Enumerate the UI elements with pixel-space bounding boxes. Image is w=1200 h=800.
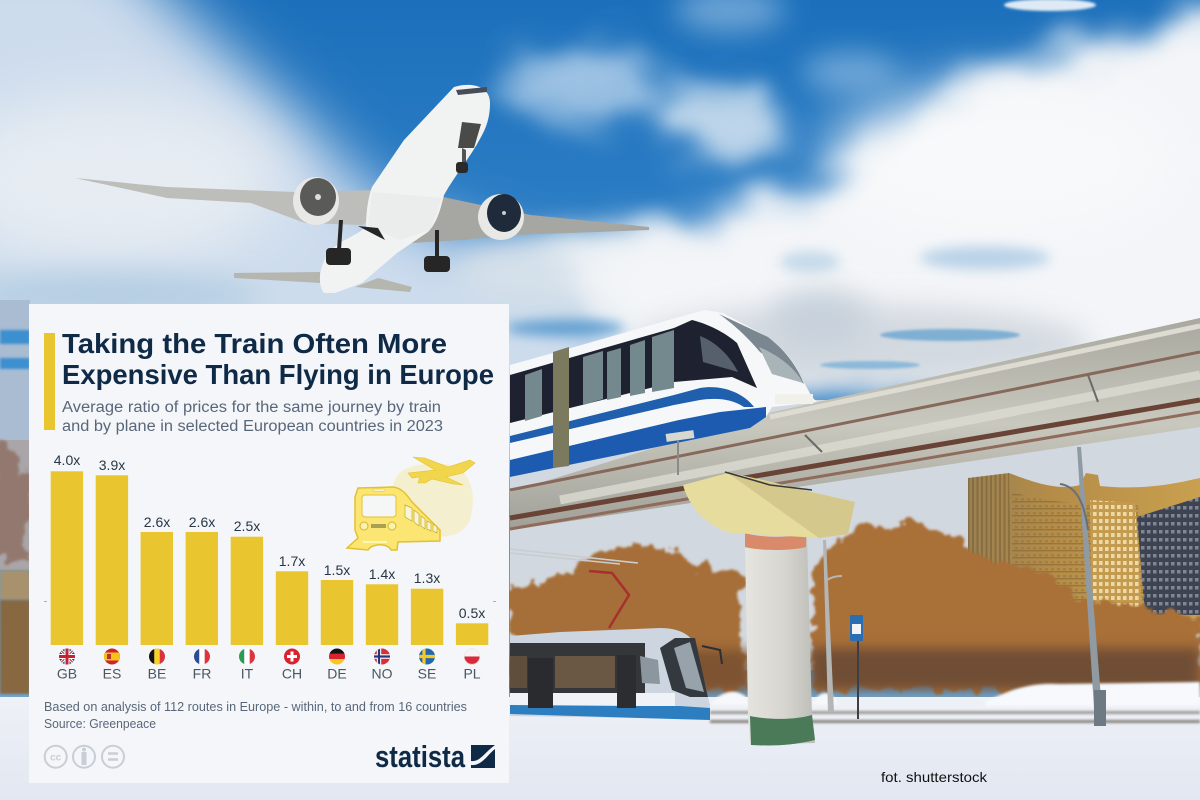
country codes: GB <box>57 666 77 682</box>
train blue stripes <box>510 387 754 443</box>
country codes: IT <box>241 666 254 682</box>
creative commons icons <box>45 746 124 768</box>
bar chart <box>44 452 496 682</box>
country codes: NO <box>372 666 393 682</box>
train roof edge and windscreen <box>719 314 804 384</box>
monorail guideway beam <box>510 318 1200 530</box>
value labels: 3.9x <box>99 457 125 473</box>
value labels: 2.5x <box>234 518 260 534</box>
bars <box>51 471 488 645</box>
autumn trees <box>0 440 1200 694</box>
left strip of trees <box>0 440 30 694</box>
country codes: FR <box>193 666 211 682</box>
value labels <box>54 452 485 621</box>
plane: right engine <box>478 194 524 240</box>
left strip of sky stripes <box>0 300 30 570</box>
source note: Source: Greenpeace <box>44 717 156 731</box>
plane: tailplane <box>234 272 412 292</box>
value labels: 1.4x <box>369 566 395 582</box>
subtitle: and by plane in selected European countries in 2023 <box>62 418 443 435</box>
monorail train <box>510 310 817 477</box>
title: Taking the Train Often More <box>62 328 447 359</box>
value labels: 0.5x <box>459 605 485 621</box>
plane: right wing <box>412 197 649 243</box>
creative commons icons: cc <box>50 752 62 764</box>
value labels: 2.6x <box>144 514 170 530</box>
plane: landing gear <box>326 220 450 272</box>
value labels: 4.0x <box>54 452 80 468</box>
plane: left engine <box>293 177 339 225</box>
country codes: BE <box>148 666 166 682</box>
train gangway <box>553 347 569 468</box>
country codes: PL <box>463 666 481 682</box>
illustration: plane and train <box>347 457 475 550</box>
country codes: CH <box>282 666 302 682</box>
snowy ground <box>0 682 1200 800</box>
country codes: ES <box>103 666 121 682</box>
chart panel <box>29 304 509 783</box>
pier: column and saddle <box>683 472 855 745</box>
country codes: DE <box>327 666 347 682</box>
train body <box>510 310 817 477</box>
country codes: SE <box>418 666 436 682</box>
subtitle: Average ratio of prices for the same journey by train <box>62 399 441 416</box>
train dark window band <box>510 320 757 423</box>
value labels: 1.5x <box>324 562 350 578</box>
photo credit: fot. shutterstock <box>881 769 988 785</box>
country flags <box>59 648 480 665</box>
heading accent bar <box>44 333 55 430</box>
value labels: 2.6x <box>189 514 215 530</box>
statista logo: statista <box>375 739 466 774</box>
airplane <box>75 85 649 293</box>
value labels: 1.7x <box>279 553 305 569</box>
title: Expensive Than Flying in Europe <box>62 359 494 390</box>
street lamps and bus stop sign <box>823 447 1106 726</box>
distant building <box>968 473 1200 620</box>
tram <box>510 549 722 720</box>
country codes <box>57 666 481 682</box>
axis ticks <box>44 601 496 602</box>
value labels: 1.3x <box>414 570 440 586</box>
train side windows <box>525 330 674 421</box>
plane: left wing <box>75 178 378 225</box>
source note: Based on analysis of 112 routes in Europe - within, to and from 16 countries <box>44 700 467 714</box>
plane: fuselage <box>320 85 490 293</box>
